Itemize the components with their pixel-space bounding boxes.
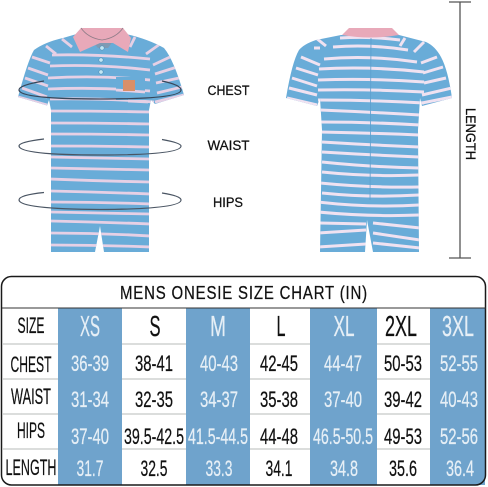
hips values: 44-48 [260, 424, 298, 449]
label: length: LENGTH [463, 108, 478, 160]
waist values: 31-34 [71, 387, 109, 412]
length dimension line [449, 2, 471, 258]
label: waist: WAIST [208, 138, 250, 153]
collar [73, 28, 131, 52]
waist values: 35-38 [260, 387, 298, 412]
chest values: 40-43 [200, 351, 238, 376]
length values: 34.1 [266, 456, 292, 481]
label: chest: CHEST [208, 83, 250, 98]
size headers [80, 311, 474, 343]
waist measurement ring [19, 139, 181, 155]
length values: 35.6 [389, 456, 417, 481]
waist values [71, 387, 478, 412]
garment: front view [18, 28, 184, 252]
neck opening [84, 32, 120, 48]
size headers: 2XL [385, 311, 417, 343]
waist values: 34-37 [200, 387, 238, 412]
row headers: LENGTH [6, 455, 57, 480]
chest values: 36-39 [71, 351, 109, 376]
hips values: 41.5-44.5 [188, 424, 248, 449]
row headers: SIZE [18, 313, 44, 338]
row headers: HIPS [17, 418, 45, 443]
length values: 31.7 [76, 456, 104, 481]
chest values: 44-47 [324, 351, 362, 376]
row headers: CHEST [10, 352, 52, 377]
pocket with badge [116, 77, 148, 102]
size headers: L [276, 311, 286, 343]
label: hips: HIPS [213, 195, 243, 210]
hips values: 37-40 [71, 424, 109, 449]
size headers: M [210, 311, 226, 343]
length values: 32.5 [140, 456, 168, 481]
hips values: 46.5-50.5 [313, 424, 373, 449]
chart title: MENS ONESIE SIZE CHART (IN) [120, 283, 368, 303]
size headers: XS [80, 311, 100, 343]
garment: back view [286, 28, 452, 252]
length values: 34.8 [330, 456, 358, 481]
back collar [342, 28, 399, 38]
chest values: 50-53 [384, 351, 422, 376]
size headers: XL [334, 311, 354, 343]
length values: 36.4 [446, 456, 474, 481]
hips values: 39.5-42.5 [124, 424, 184, 449]
waist values: 39-42 [384, 387, 422, 412]
row headers [6, 313, 57, 480]
size headers: S [150, 311, 160, 343]
blue size columns [58, 308, 485, 485]
placket buttons [99, 46, 104, 74]
length values [76, 456, 474, 481]
waist values: 32-35 [135, 387, 173, 412]
chest values: 42-45 [260, 351, 298, 376]
size chart table [2, 276, 486, 485]
row dividers [3, 344, 430, 449]
waist values: 37-40 [324, 387, 362, 412]
length values: 33.3 [206, 456, 232, 481]
table frame [2, 276, 486, 485]
hips values [71, 424, 478, 449]
chest values [71, 351, 478, 376]
chest measurement ring [19, 81, 181, 99]
chest values: 38-41 [135, 351, 173, 376]
row headers: WAIST [11, 384, 51, 409]
hips values: 49-53 [384, 424, 422, 449]
hips measurement ring [19, 192, 181, 210]
